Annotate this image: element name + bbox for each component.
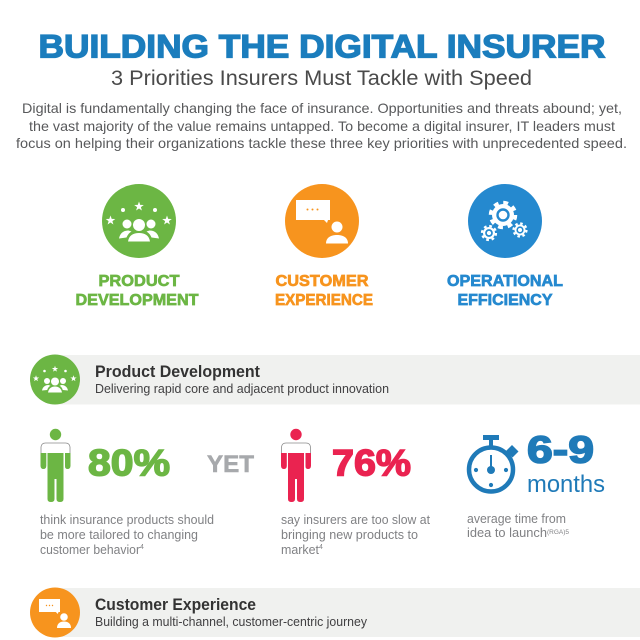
heading: Customer Experience (95, 595, 256, 614)
description: average time from (467, 511, 566, 526)
title: BUILDING THE DIGITAL INSURER (38, 28, 606, 64)
description: 4 (140, 544, 144, 551)
subheading: Building a multi-channel, customer-centric journey (95, 615, 368, 629)
stat: 76 percent (281, 429, 430, 557)
icon: team with stars (102, 184, 176, 258)
description (40, 512, 214, 557)
description: bringing new products to (281, 527, 418, 542)
description: (RGA)5 (547, 529, 569, 536)
description (281, 512, 430, 557)
description: think insurance products should (40, 512, 214, 527)
label: DEVELOPMENT (76, 292, 199, 309)
intro paragraph: Digital is fundamentally changing the face of insurance. Opportunities and threats abound; yet, (22, 100, 622, 116)
label (275, 273, 373, 309)
stat: 80 percent (40, 429, 214, 557)
priority: customer experience (275, 184, 373, 309)
priority: operational efficiency (447, 184, 563, 309)
icon: stopwatch (469, 435, 518, 492)
value: 80% (88, 442, 170, 484)
icon: person green (40, 429, 70, 502)
subtitle: 3 Priorities Insurers Must Tackle with Speed (111, 67, 532, 90)
connector word: yet: YET (207, 451, 254, 478)
heading: Product Development (95, 362, 260, 381)
icon: team with stars small (30, 354, 80, 404)
icon: chat and person small (30, 588, 80, 638)
value: 76% (332, 442, 411, 484)
intro paragraph: focus on helping their organizations tackle these three key priorities with unprecedented speed. (16, 135, 627, 151)
label (447, 273, 563, 309)
description: market (281, 542, 319, 557)
label: OPERATIONAL (447, 273, 563, 290)
description: customer behavior (40, 542, 141, 557)
description: idea to launch (467, 525, 547, 540)
description: be more tailored to changing (40, 527, 198, 542)
label: PRODUCT (98, 273, 180, 290)
description: 4 (319, 544, 323, 551)
description (467, 511, 569, 540)
label: EFFICIENCY (458, 292, 553, 309)
label: EXPERIENCE (275, 292, 373, 309)
description: say insurers are too slow at (281, 512, 430, 527)
stat: 6-9 months (467, 430, 605, 540)
unit: months (527, 471, 605, 498)
value: 6-9 (527, 430, 594, 472)
panel: customer experience header (30, 588, 640, 638)
label (76, 273, 199, 309)
intro paragraph (16, 100, 627, 151)
icon: person red (281, 429, 311, 502)
panel: product development header (30, 354, 640, 404)
priority: product development (76, 184, 199, 309)
label: CUSTOMER (276, 273, 369, 290)
subheading: Delivering rapid core and adjacent product innovation (95, 382, 389, 396)
icon: gears (468, 184, 542, 258)
icon: chat and person (285, 184, 359, 258)
intro paragraph: the vast majority of the value remains untapped. To become a digital insurer, IT leaders must (29, 118, 615, 134)
